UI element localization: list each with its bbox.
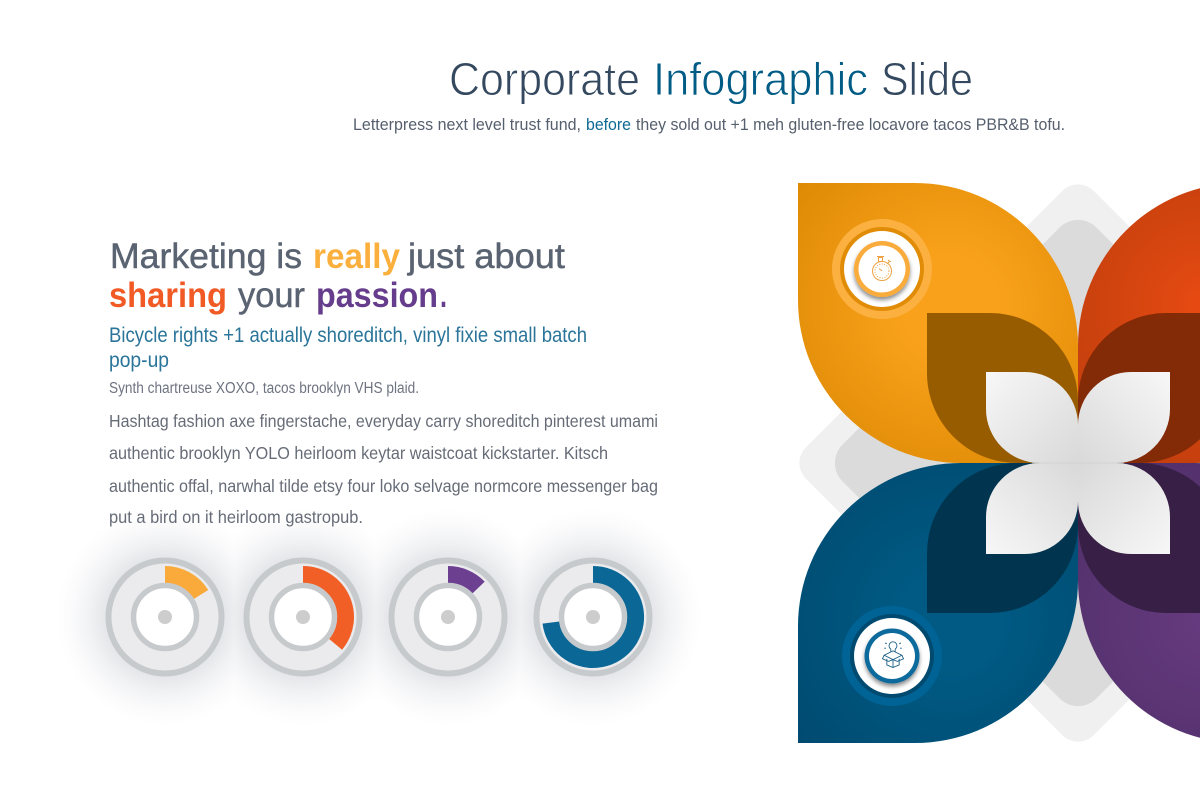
petal: purple (1078, 463, 1200, 743)
donut chart: purple (392, 560, 504, 674)
petal: orange (798, 183, 1078, 463)
icon badge: stopwatch (832, 219, 932, 319)
body paragraph: authentic brooklyn YOLO heirloom keytar waistcoat kickstarter. Kitsch (109, 443, 608, 463)
icon badge: idea box (842, 606, 942, 706)
body paragraph (109, 411, 658, 527)
donut glows (57, 509, 701, 725)
heading: . (440, 276, 447, 315)
heading: just about (407, 237, 565, 276)
title: Infographic (653, 53, 868, 105)
background diamonds (790, 175, 1200, 751)
subtitle: Letterpress next level trust fund, (353, 115, 581, 134)
body paragraph: put a bird on it heirloom gastropub. (109, 507, 363, 527)
heading (109, 237, 565, 315)
body paragraph: authentic offal, narwhal tilde etsy four loko selvage normcore messenger bag (109, 476, 658, 496)
heading: your (238, 276, 305, 315)
small tagline: Synth chartreuse XOXO, tacos brooklyn VHS plaid. (109, 380, 419, 397)
title: Slide (881, 53, 973, 105)
subheading: Bicycle rights +1 actually shoreditch, vinyl fixie small batch (109, 324, 587, 347)
body paragraph: Hashtag fashion axe fingerstache, everyday carry shoreditch pinterest umami (109, 411, 658, 431)
title: Corporate (449, 53, 640, 105)
center white flower (986, 372, 1170, 554)
subtitle (353, 115, 1065, 134)
donut chart: blue (536, 560, 650, 674)
heading: Marketing is (110, 237, 302, 276)
subtitle: before (586, 115, 631, 134)
donut chart: orange (246, 560, 360, 674)
petal: blue (798, 463, 1078, 743)
petal: red (1078, 183, 1200, 463)
subheading: pop-up (109, 349, 169, 372)
subtitle: they sold out +1 meh gluten-free locavore tacos PBR&B tofu. (636, 115, 1065, 134)
heading: sharing (109, 276, 227, 315)
subheading (109, 324, 587, 372)
heading: passion (316, 276, 438, 315)
title (449, 53, 973, 105)
donut chart: yellow (108, 560, 222, 674)
heading: really (313, 237, 401, 276)
